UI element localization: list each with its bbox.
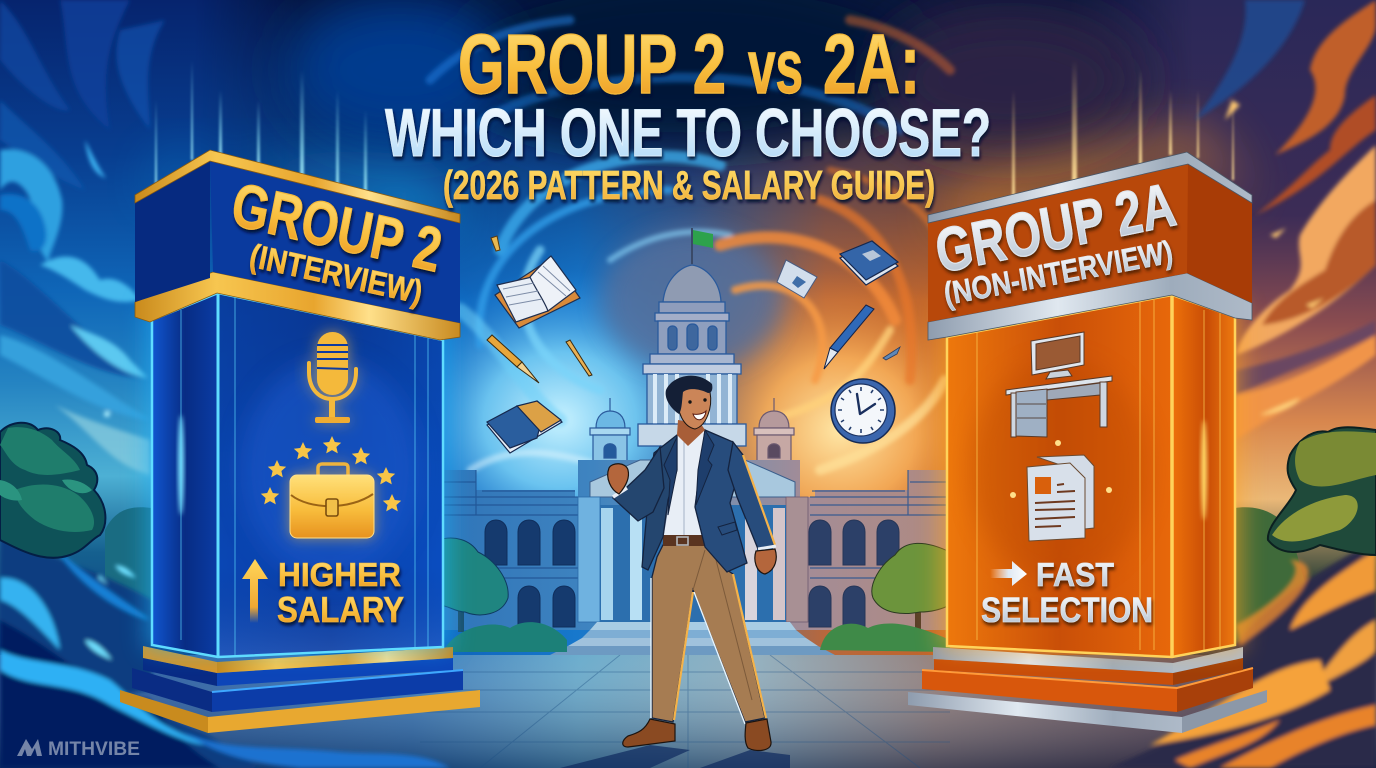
shirt bbox=[663, 430, 705, 537]
icon: blue pen bbox=[824, 305, 874, 369]
body bbox=[152, 293, 443, 657]
smile and eyes bbox=[688, 398, 707, 420]
vertical light beams bbox=[155, 60, 1234, 198]
left side scenery: trees and waves bbox=[0, 423, 450, 768]
neck bbox=[677, 420, 705, 446]
title line 1: 2A: bbox=[823, 17, 920, 111]
heading: Group 2A: GROUP 2A bbox=[931, 170, 1181, 287]
right small dome bbox=[754, 398, 794, 463]
icon: gold pen bbox=[487, 335, 539, 383]
floating items around dome bbox=[487, 236, 900, 453]
icon: blue book bbox=[840, 241, 898, 285]
portico bbox=[578, 460, 808, 622]
back tree right bbox=[1234, 507, 1310, 645]
arched windows bbox=[485, 520, 575, 627]
student character bbox=[608, 376, 776, 750]
lower silver band bbox=[928, 273, 1252, 340]
back tree left bbox=[105, 507, 152, 610]
icon: microphone bbox=[309, 332, 356, 423]
left small dome bbox=[590, 398, 630, 463]
title line 3: (2026 PATTERN & SALARY GUIDE) bbox=[443, 162, 935, 208]
icon: clock bbox=[831, 379, 895, 443]
callout: fast selection: FAST bbox=[1036, 556, 1114, 593]
icon: closed book bbox=[487, 401, 562, 453]
jacket left panel bbox=[642, 435, 677, 570]
arm lowered bbox=[728, 442, 775, 549]
callout: higher salary: SALARY bbox=[277, 589, 404, 630]
title line 2: WHICH ONE TO CHOOSE? bbox=[385, 95, 991, 171]
title line 1: vs bbox=[748, 25, 803, 110]
base steps bbox=[908, 647, 1267, 733]
hair bbox=[666, 376, 712, 414]
jacket right panel bbox=[695, 430, 747, 572]
watermark logo: MITHVIBE bbox=[48, 739, 140, 760]
callout: higher salary: HIGHER bbox=[278, 556, 401, 593]
pedestal: Group 2 (blue and gold) bbox=[120, 150, 480, 733]
belt bbox=[663, 535, 705, 546]
heading: Group 2: GROUP 2 bbox=[226, 170, 447, 286]
tree right bbox=[1268, 427, 1376, 555]
lapels and pocket bbox=[664, 430, 737, 535]
title bbox=[385, 17, 991, 208]
flames lower right bbox=[1110, 540, 1376, 768]
cap bbox=[135, 150, 460, 323]
callout: higher salary bbox=[242, 556, 404, 630]
callout: fast selection bbox=[981, 556, 1153, 630]
icon: small key bbox=[491, 236, 500, 251]
icon: documents bbox=[1010, 440, 1112, 541]
lower hand bbox=[755, 549, 776, 574]
head bbox=[678, 386, 711, 429]
pedestal: Group 2A (orange and silver) bbox=[908, 152, 1267, 733]
body bbox=[947, 295, 1235, 657]
pants bbox=[652, 545, 765, 722]
callout: fast selection: SELECTION bbox=[981, 591, 1153, 630]
base steps bbox=[120, 646, 480, 733]
right side scenery: trees and flames bbox=[1110, 427, 1376, 768]
waves left bbox=[0, 535, 450, 768]
arm raised bbox=[613, 447, 664, 521]
icon: desk with computer bbox=[1006, 332, 1112, 437]
glow above the pedestals bbox=[150, 160, 460, 230]
icon: paper stack bbox=[777, 260, 817, 298]
main facade bbox=[440, 460, 950, 630]
body glow bbox=[940, 300, 1242, 650]
stairs bbox=[550, 622, 835, 655]
swirling clouds left bbox=[0, 0, 165, 475]
fist bbox=[608, 464, 629, 494]
ground plaza with tiles bbox=[0, 655, 1376, 768]
lower gold band bbox=[135, 272, 460, 340]
heading: Group 2: (INTERVIEW) bbox=[247, 237, 426, 311]
icon: small pencil bbox=[566, 340, 592, 376]
shoes bbox=[623, 719, 771, 750]
icon: briefcase with stars bbox=[261, 436, 401, 538]
heading: Group 2A: (NON-INTERVIEW) bbox=[941, 234, 1175, 312]
courtyard trees bbox=[438, 538, 950, 652]
flame clouds right bbox=[1195, 0, 1376, 440]
title line 1: GROUP 2 bbox=[458, 17, 726, 111]
cap bbox=[928, 152, 1252, 322]
heading: Group 2A bbox=[931, 170, 1181, 312]
government building with dome bbox=[438, 228, 950, 655]
central dome and tower bbox=[638, 228, 746, 446]
tree left bbox=[0, 423, 105, 558]
icon: open book bbox=[495, 256, 580, 328]
body glow bbox=[146, 300, 450, 650]
icon: small pen cap bbox=[883, 347, 900, 360]
